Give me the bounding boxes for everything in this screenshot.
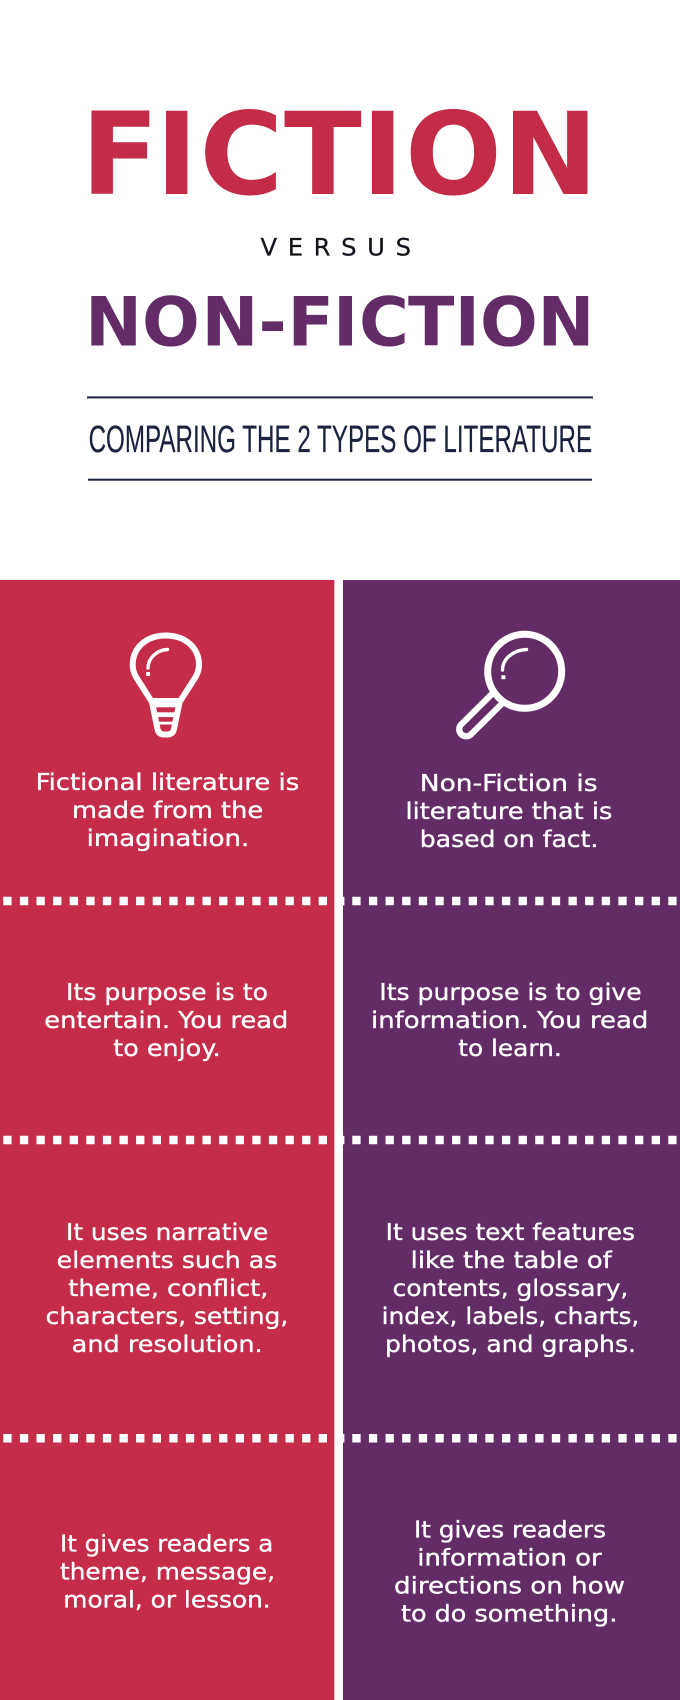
panel: non-fiction column: [343, 580, 680, 1700]
icon: magnifying glass: [459, 634, 562, 736]
text: fiction elements: elements such as: [57, 1246, 277, 1274]
text: non-fiction features: index, labels, charts,: [382, 1302, 639, 1330]
text: non-fiction definition: literature that is: [406, 797, 612, 825]
text: fiction message: moral, or lesson.: [63, 1586, 271, 1614]
text: non-fiction definition: Non-Fiction is: [420, 769, 598, 797]
panel: fiction column: [0, 580, 334, 1700]
text: non-fiction directions: [394, 1515, 625, 1627]
text: non-fiction directions: directions on how: [394, 1571, 625, 1599]
icon: light bulb: [133, 636, 199, 734]
text: fiction definition: made from the: [72, 796, 263, 824]
text: fiction definition: [36, 768, 299, 852]
text: non-fiction features: It uses text features: [386, 1218, 635, 1246]
title: FICTION: FICTION: [81, 88, 598, 221]
text: fiction message: [60, 1530, 275, 1614]
header: [81, 88, 598, 481]
text: non-fiction directions: It gives readers: [414, 1515, 606, 1543]
text: non-fiction purpose: information. You read: [371, 1006, 648, 1034]
text: non-fiction directions: to do something.: [401, 1599, 617, 1627]
title: NON-FICTION: NON-FICTION: [85, 284, 594, 363]
text: non-fiction features: [382, 1218, 639, 1358]
text: fiction message: theme, message,: [60, 1558, 275, 1586]
text: fiction elements: theme, conflict,: [68, 1274, 268, 1302]
text: fiction elements: [46, 1218, 288, 1358]
text: fiction purpose: entertain. You read: [44, 1006, 288, 1034]
text: non-fiction purpose: to learn.: [458, 1034, 562, 1062]
text: fiction definition: Fictional literature is: [36, 768, 299, 796]
text: non-fiction definition: [406, 769, 612, 853]
text: non-fiction directions: information or: [417, 1543, 602, 1571]
text: non-fiction purpose: Its purpose is to give: [379, 978, 642, 1006]
text: fiction elements: It uses narrative: [66, 1218, 268, 1246]
text: non-fiction purpose: [371, 978, 648, 1062]
text: non-fiction features: like the table of: [411, 1246, 612, 1274]
text: non-fiction definition: based on fact.: [420, 825, 598, 853]
text: non-fiction features: contents, glossary,: [393, 1274, 628, 1302]
label: VERSUS: VERSUS: [260, 233, 411, 262]
text: fiction elements: and resolution.: [72, 1330, 263, 1358]
text: fiction elements: characters, setting,: [46, 1302, 288, 1330]
text: fiction definition: imagination.: [87, 824, 249, 852]
text: non-fiction features: photos, and graphs.: [385, 1330, 636, 1358]
text: fiction purpose: [44, 978, 288, 1062]
text: fiction purpose: Its purpose is to: [66, 978, 268, 1006]
text: fiction message: It gives readers a: [60, 1530, 273, 1558]
text: fiction purpose: to enjoy.: [113, 1034, 221, 1062]
